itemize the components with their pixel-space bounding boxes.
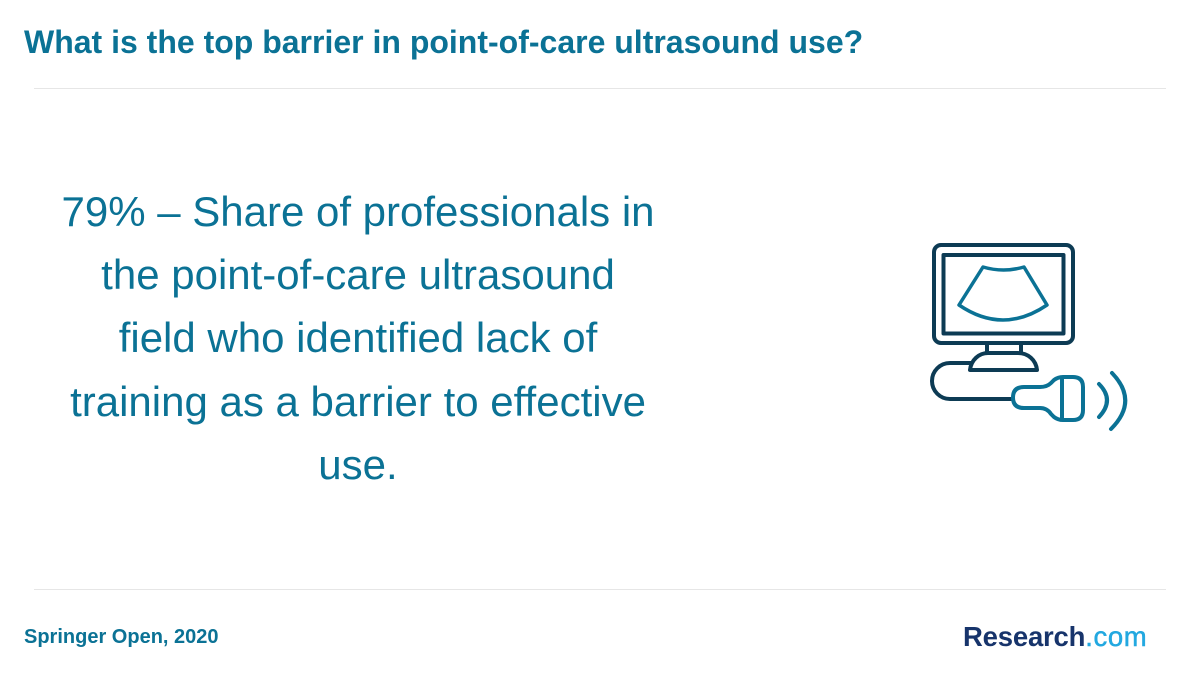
monitor stand <box>970 344 1037 370</box>
title: What is the top barrier in point-of-care ultrasound use? <box>24 24 863 60</box>
ultrasound image sector <box>959 267 1047 320</box>
logo: Research.com <box>963 621 1147 652</box>
icon: ultrasound machine <box>930 243 1128 432</box>
main statistic text: 79% – Share of professionals in <box>61 188 655 235</box>
main statistic text: the point-of-care ultrasound <box>101 251 615 298</box>
probe <box>1013 377 1083 420</box>
main statistic text: use. <box>318 441 398 488</box>
monitor <box>934 245 1073 343</box>
source: Springer Open, 2020 <box>24 626 219 648</box>
main statistic text: training as a barrier to effective <box>70 378 646 425</box>
cable <box>932 363 1013 399</box>
main statistic text <box>61 188 655 488</box>
main statistic text: field who identified lack of <box>119 314 597 361</box>
sound waves <box>1099 373 1125 429</box>
